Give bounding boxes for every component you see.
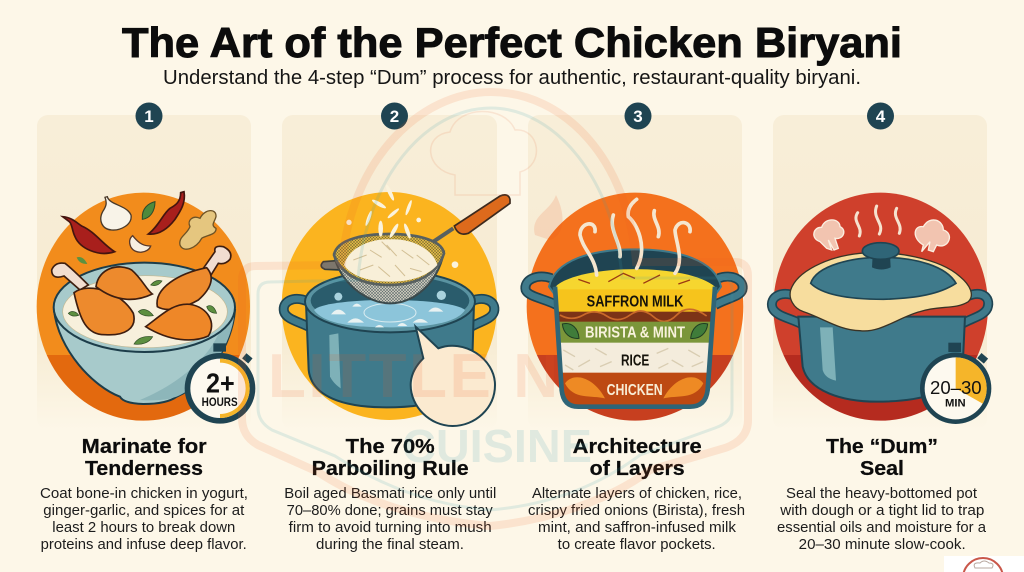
corner logo stamp	[944, 556, 1024, 572]
pot handles	[525, 277, 743, 305]
watermark logo	[242, 92, 748, 526]
watermark flame	[534, 195, 563, 240]
step 2 description: during the final steam.	[316, 537, 464, 553]
strainer mesh bowl	[334, 252, 444, 303]
pot body	[306, 303, 474, 407]
layer label: birista and mint: BIRISTA & MINT	[585, 324, 686, 341]
step 3 heading: Architecture	[573, 436, 702, 458]
thigh top	[96, 267, 152, 299]
strainer hook	[321, 261, 342, 270]
step 1 number badge: 1	[144, 107, 154, 126]
step 2 description: Boil aged Basmati rice only until	[284, 486, 496, 502]
water bubbles	[331, 291, 446, 327]
2+ hours timer: 2+	[206, 368, 235, 399]
pot body	[798, 317, 965, 402]
pot highlight	[820, 327, 836, 381]
pot inner	[311, 275, 469, 326]
watermark chef hat	[431, 111, 536, 195]
red background circle	[774, 192, 988, 421]
yogurt marinade	[63, 276, 227, 348]
rice band	[560, 342, 709, 373]
pot rim	[305, 271, 475, 332]
step 3 number badge	[624, 102, 652, 130]
step 4 card	[773, 115, 987, 430]
step 4 number badge: 4	[876, 107, 886, 126]
orange handle grip	[454, 195, 510, 234]
panel: step 1 marinate	[30, 102, 270, 553]
step 2 heading: The 70%	[346, 436, 435, 458]
step 1 description: Coat bone-in chicken in yogurt,	[40, 486, 248, 502]
bowl rim	[54, 263, 235, 352]
step 4 description: with dough or a tight lid to trap	[779, 503, 984, 519]
step 2 illustration: rice strainer over pot	[282, 184, 510, 426]
step 1 illustration: marinating chicken bowl	[36, 190, 256, 424]
falling rice grains	[346, 184, 458, 268]
20-30 min timer	[920, 343, 991, 424]
title: The Art of the Perfect Chicken Biryani	[122, 19, 902, 66]
layer label: saffron milk: SAFFRON MILK	[587, 294, 683, 311]
step 3 heading	[573, 436, 702, 480]
steam wisps	[580, 199, 690, 275]
step 1 heading: Tenderness	[85, 458, 203, 480]
step 2 card	[282, 115, 497, 430]
panel: step 3 layers	[515, 102, 755, 553]
thigh lower	[146, 304, 212, 340]
steam puffs	[814, 220, 949, 252]
onion squiggle	[560, 309, 707, 321]
step 3 number badge: 3	[633, 107, 643, 126]
step 4 description	[777, 486, 987, 553]
step 4 heading: Seal	[860, 458, 904, 480]
watermark inner emblem outline	[258, 108, 732, 510]
pot body outline	[555, 287, 715, 407]
step 2 description: firm to avoid turning into mush	[289, 520, 492, 536]
lid	[811, 257, 956, 299]
orange background circle	[526, 192, 744, 421]
small leaf	[77, 257, 87, 264]
mint band	[560, 322, 710, 343]
garlic bulb	[101, 197, 131, 230]
step 4 heading	[826, 436, 938, 480]
2+ hours timer	[185, 343, 255, 424]
20-30 min timer: 20–30	[930, 377, 982, 398]
water ripple	[364, 303, 416, 322]
empty callout bubble	[411, 327, 495, 426]
birista onions band	[552, 312, 718, 322]
step 4 number badge	[867, 102, 894, 130]
pot rim and interior	[549, 249, 721, 295]
step 1 description: least 2 hours to break down	[52, 520, 235, 536]
panel: step 2 parboil	[282, 102, 510, 553]
step 3 description: to create flavor pockets.	[558, 537, 716, 553]
ginger root	[180, 211, 216, 249]
step 3 illustration: layered pot	[515, 190, 755, 425]
saffron strands	[578, 273, 690, 284]
boiling water	[314, 300, 465, 327]
step 3 description	[528, 486, 745, 553]
step 1 description: proteins and infuse deep flavor.	[41, 537, 247, 553]
dough seal	[790, 253, 971, 331]
drumstick left	[52, 263, 134, 335]
garlic clove	[130, 236, 151, 252]
step 1 card	[37, 115, 251, 430]
step 2 heading	[312, 436, 469, 480]
pot highlight	[329, 333, 341, 388]
yellow background circle	[282, 192, 497, 420]
step 1 description: ginger-garlic, and spices for at	[43, 503, 244, 519]
step 3 heading: of Layers	[590, 458, 685, 480]
rice grains	[353, 242, 429, 277]
layer label: rice: RICE	[621, 353, 649, 370]
step 4 description: Seal the heavy-bottomed pot	[786, 486, 977, 502]
bowl shade	[140, 317, 234, 400]
watermark LITTLE N word: LITTLE N	[268, 342, 558, 411]
mint leaves	[562, 324, 708, 338]
step 4 description: 20–30 minute slow-cook.	[799, 537, 966, 553]
rice texture	[563, 348, 703, 370]
step 4 heading: The “Dum”	[826, 436, 938, 458]
pot layers	[552, 268, 718, 406]
right chili	[148, 192, 184, 234]
step 2 heading: Parboiling Rule	[312, 458, 469, 480]
subtitle: Understand the 4-step “Dum” process for authentic, restaurant-quality biryani.	[163, 67, 861, 89]
step 3 description: mint, and saffron-infused milk	[538, 520, 737, 536]
step 2 number badge	[381, 102, 408, 130]
step 3 description: Alternate layers of chicken, rice,	[532, 486, 742, 502]
step 1 description	[40, 486, 248, 553]
2+ hours timer: HOURS	[202, 396, 238, 409]
orange background circle	[36, 192, 250, 421]
chicken band	[562, 372, 707, 404]
chicken pieces	[565, 377, 703, 398]
steam wisps	[856, 206, 900, 236]
watermark outer emblem outline	[242, 92, 748, 526]
step 2 description	[284, 486, 496, 553]
leaf	[142, 202, 155, 219]
left chili	[63, 217, 115, 253]
20-30 min timer: MIN	[945, 398, 966, 410]
strainer handle	[433, 228, 453, 242]
step 4 illustration: sealed pot	[766, 192, 994, 424]
step 1 heading: Marinate for	[82, 436, 207, 458]
lid knob	[862, 243, 899, 269]
bowl body	[54, 310, 235, 404]
drumstick right	[157, 246, 231, 309]
herb leaves	[68, 280, 217, 344]
step 1 number badge	[136, 102, 162, 130]
step 4 description: essential oils and moisture for a	[777, 520, 987, 536]
step 3 description: crispy fried onions (Birista), fresh	[528, 503, 745, 519]
rice mound	[344, 239, 437, 282]
watermark CUISINE word: CUISINE	[402, 420, 592, 472]
step 2 number badge: 2	[390, 107, 399, 126]
panel: step 4 dum seal	[766, 102, 994, 549]
strainer inner	[334, 234, 444, 285]
pot handles	[772, 294, 988, 325]
pot handles	[284, 299, 494, 328]
step 3 card	[528, 115, 742, 430]
step 1 heading	[82, 436, 207, 480]
saffron milk band	[558, 290, 712, 312]
step 2 description: 70–80% done; grains must stay	[287, 503, 493, 519]
layer label: chicken: CHICKEN	[607, 382, 663, 399]
saffron dome	[556, 269, 715, 290]
